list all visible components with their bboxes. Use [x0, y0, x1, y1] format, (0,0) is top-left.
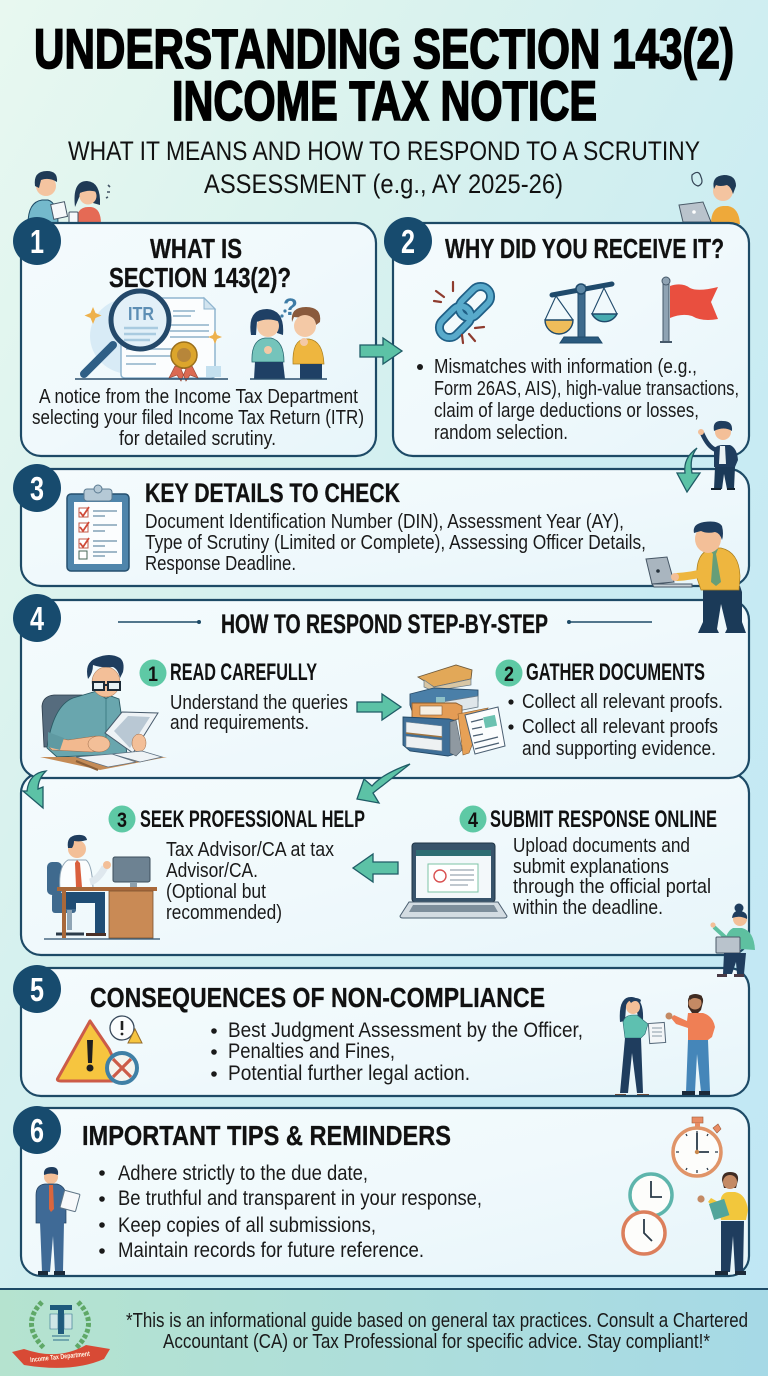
badge 6: 6	[30, 1112, 44, 1149]
step 4: submit explanations	[513, 856, 669, 878]
step 4: within the deadline.	[512, 897, 663, 919]
step 1: 1	[148, 663, 158, 686]
heading: consequences: CONSEQUENCES OF NON-COMPLIANCE	[90, 982, 545, 1013]
panel 5	[21, 968, 749, 1096]
text: tips: Be truthful and transparent in your response,	[118, 1186, 482, 1210]
badge 4: 4	[30, 600, 44, 637]
badge 1	[13, 217, 61, 265]
step 3	[108, 806, 365, 924]
step 3: SEEK PROFESSIONAL HELP	[140, 806, 365, 833]
badge 2	[384, 217, 432, 265]
illustration: person at laptop	[679, 172, 740, 224]
text: details: Type of Scrutiny (Limited or Complete), Assessing Officer Details,	[145, 532, 646, 554]
arrow: step 4 to 3	[353, 854, 398, 882]
subtitle	[68, 136, 700, 199]
heading: key details: KEY DETAILS TO CHECK	[145, 478, 400, 508]
panel 4: step-by-step upper	[21, 600, 749, 778]
illustration: man with laptop and tie	[646, 522, 746, 633]
footer band	[0, 1289, 768, 1376]
step 4: through the official portal	[513, 876, 711, 898]
text: consequences: Penalties and Fines,	[228, 1039, 395, 1063]
icon: warning symbols	[57, 1016, 142, 1083]
badge 3	[13, 464, 61, 512]
illustration: woman with laptop	[710, 904, 755, 977]
step 3: Tax Advisor/CA at tax	[166, 839, 334, 861]
number badges	[13, 217, 432, 1154]
logo: emblem	[12, 1302, 110, 1368]
logo: emblem: Income Tax Department	[30, 1351, 91, 1364]
text: reasons: random selection.	[434, 422, 568, 444]
text: definition: for detailed scrutiny.	[119, 428, 276, 450]
step 2: Collect all relevant proofs.	[522, 691, 723, 713]
illustration: laptop portal	[400, 843, 507, 918]
illustration: man with clipboard	[697, 1172, 748, 1275]
title	[34, 17, 734, 132]
text: definition	[32, 386, 364, 450]
illustration: magnifier over ITR	[75, 291, 228, 381]
illustration: advisor at desk	[44, 835, 160, 939]
text: details: Document Identification Number (DIN), Assessment Year (AY),	[145, 511, 624, 533]
arrow: curved left	[23, 771, 46, 808]
step 4	[460, 806, 717, 919]
step 2: and supporting evidence.	[522, 738, 716, 760]
step 3: 3	[117, 809, 127, 832]
text: tips: Maintain records for future reference.	[118, 1238, 424, 1262]
step 1: and requirements.	[170, 712, 309, 734]
illustration: couple with documents	[28, 171, 110, 224]
text: reasons	[417, 356, 739, 444]
arrow: curved down to panel 3	[677, 448, 700, 492]
illustration: two colleagues discussing	[615, 994, 715, 1095]
panel 6	[21, 1108, 749, 1276]
panel 3	[21, 469, 749, 586]
text: consequences	[211, 1018, 583, 1085]
arrow: step 1 to 2	[357, 694, 401, 720]
icon: clipboard checklist	[67, 485, 129, 571]
badge 2: 2	[401, 223, 415, 260]
illustration: magnifier over ITR: ITR	[128, 304, 154, 324]
step 4: Upload documents and	[513, 835, 690, 857]
icon: teal clock	[630, 1174, 672, 1216]
text: definition: selecting your filed Income Tax Return (ITR)	[32, 407, 364, 429]
arrow: panel 1 to 2	[360, 338, 402, 364]
step 1	[140, 659, 348, 734]
illustration: confused couple	[250, 294, 327, 379]
illustration: man pointing	[698, 421, 738, 490]
title: INCOME TAX NOTICE	[172, 69, 597, 132]
text: consequences: Best Judgment Assessment by the Officer,	[228, 1018, 583, 1042]
illustration: man reading	[40, 655, 167, 770]
badge 3: 3	[30, 470, 44, 507]
step 1: Understand the queries	[170, 692, 348, 714]
footer disclaimer	[126, 1310, 748, 1353]
step 3: Advisor/CA.	[166, 860, 258, 882]
illustration: confused couple: ?	[283, 294, 298, 321]
heading with rules: HOW TO RESPOND STEP-BY-STEP	[221, 609, 548, 639]
heading: tips: IMPORTANT TIPS & REMINDERS	[82, 1120, 451, 1151]
illustration: stack of books	[403, 665, 505, 756]
text: tips	[99, 1161, 482, 1262]
icon: orange clock	[623, 1212, 665, 1254]
panel 1	[21, 223, 376, 456]
icon: red flag	[660, 277, 718, 343]
step 2: 2	[504, 663, 514, 686]
heading: what is section 143(2): WHAT IS	[150, 233, 242, 264]
icon: broken chain link	[434, 282, 495, 343]
panel 4b content: lower steps	[23, 764, 717, 939]
heading: what is section 143(2): SECTION 143(2)?	[109, 262, 291, 293]
text: reasons: Mismatches with information (e.g.,	[434, 356, 697, 378]
step 1: READ CAREFULLY	[170, 659, 317, 686]
subtitle: ASSESSMENT (e.g., AY 2025-26)	[204, 169, 563, 199]
step 3: (Optional but	[166, 881, 266, 903]
badge 1: 1	[30, 223, 44, 260]
step 4: 4	[468, 809, 478, 832]
illustration: man with tablet	[36, 1167, 80, 1275]
text: tips: Adhere strictly to the due date,	[118, 1161, 368, 1185]
badge 4	[13, 594, 61, 642]
icon: stopwatch	[673, 1117, 721, 1176]
text: details: Response Deadline.	[145, 553, 296, 575]
badge 5: 5	[30, 971, 44, 1008]
icon: balance scales	[545, 284, 617, 343]
text: consequences: Potential further legal action.	[228, 1061, 470, 1085]
text: reasons: claim of large deductions or losses,	[434, 400, 699, 422]
text: details	[145, 511, 646, 575]
arrow: down-left diagonal	[357, 764, 410, 803]
panel 2	[393, 223, 749, 456]
heading: what is section 143(2)	[109, 233, 291, 293]
step 2: Collect all relevant proofs	[522, 716, 718, 738]
text: definition: A notice from the Income Tax Department	[39, 386, 358, 408]
step 2	[496, 659, 723, 760]
text: tips: Keep copies of all submissions,	[118, 1213, 376, 1237]
badge 5	[13, 965, 61, 1013]
step 3: recommended)	[166, 902, 282, 924]
panel 4b: lower steps background	[21, 773, 749, 955]
badge 6	[13, 1106, 61, 1154]
